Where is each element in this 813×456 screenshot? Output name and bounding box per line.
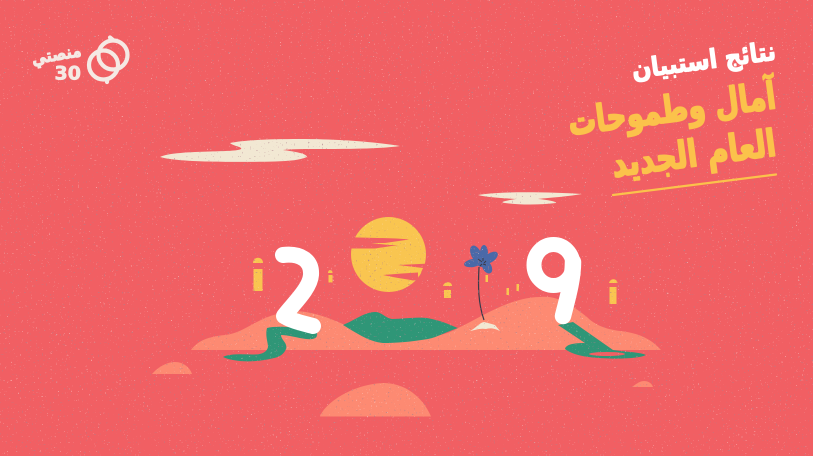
lighthouse: left large bbox=[253, 258, 263, 291]
lighthouse: right bbox=[609, 279, 618, 304]
logo wordmark: 30 bbox=[55, 62, 81, 84]
palm flower tree bbox=[463, 244, 500, 320]
sun bbox=[345, 217, 432, 292]
digit 2 bbox=[283, 255, 313, 326]
logo icon: two rings bbox=[89, 38, 128, 82]
mound: lower centre bbox=[320, 383, 431, 416]
digit 9 bbox=[534, 244, 573, 316]
small towers bbox=[486, 275, 519, 295]
green snake shadow of 2 bbox=[223, 327, 317, 361]
cloud: large left bbox=[160, 139, 400, 162]
title underline bbox=[613, 174, 776, 195]
cloud: small right bbox=[478, 192, 582, 204]
lighthouse: near flower bbox=[443, 282, 452, 298]
title line 1: نتائج استبيان bbox=[630, 37, 778, 85]
main island hills bbox=[191, 297, 661, 350]
green shadow of 9 bbox=[558, 322, 646, 359]
mound: lower left bbox=[152, 362, 192, 374]
logo wordmark: منصتي bbox=[30, 40, 83, 70]
logo wordmark bbox=[30, 40, 83, 84]
white mound at tree base bbox=[470, 322, 500, 331]
lighthouse: small near 2 bbox=[328, 270, 332, 282]
green central hill bbox=[343, 312, 458, 343]
mound: lower right bbox=[632, 381, 653, 387]
title text bbox=[561, 37, 790, 192]
shadow hole bbox=[589, 352, 625, 356]
